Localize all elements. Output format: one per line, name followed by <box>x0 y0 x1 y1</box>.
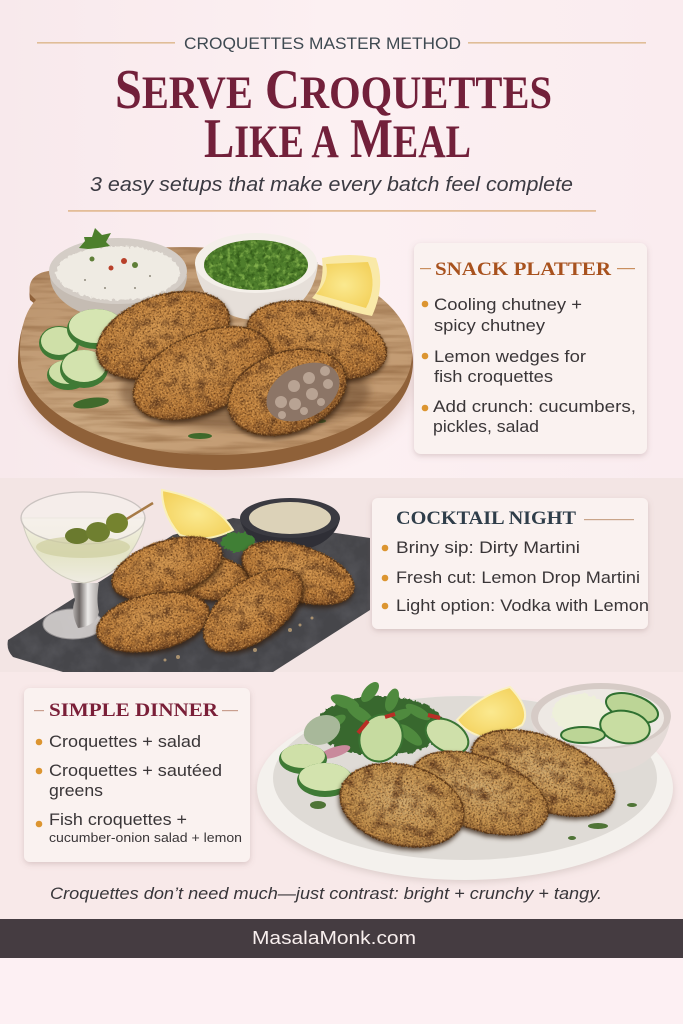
bullet: lemon: Lemon wedges for <box>434 348 587 366</box>
footer bar <box>0 919 683 958</box>
heading: COCKTAIL NIGHT <box>396 508 576 529</box>
title line 2: LIKE A MEAL <box>204 108 471 170</box>
card <box>24 688 250 862</box>
bowl: cooling chutney <box>49 228 187 319</box>
crumb scatter <box>164 616 314 662</box>
bullet: greens: Croquettes + sautéed <box>49 762 222 780</box>
herb scatter <box>310 801 637 840</box>
bullet: fish <box>36 811 242 845</box>
plate cucumbers <box>279 744 353 797</box>
croquette back right <box>239 288 395 392</box>
croquette middle <box>401 735 559 851</box>
lemon wedge <box>457 687 525 737</box>
cocktail band background <box>0 478 683 672</box>
bullet: light option: Light option: Vodka with Lemon <box>396 597 649 615</box>
dip bowl <box>240 498 340 551</box>
illustration: simple dinner <box>257 679 673 882</box>
cucumbers <box>39 309 125 390</box>
subtitle: 3 easy setups that make every batch feel complete <box>90 174 573 196</box>
martini glass <box>21 492 153 639</box>
slate board <box>8 518 370 672</box>
croquette right <box>460 713 626 833</box>
parsley sprig <box>79 228 111 249</box>
croquette behind <box>161 549 253 605</box>
croquette top left <box>104 525 230 611</box>
illustration: snack platter <box>18 228 413 474</box>
bullet: salad: Croquettes + salad <box>49 733 201 751</box>
salad bowl <box>531 683 671 774</box>
illustration: cocktail night <box>8 490 370 672</box>
croquette back left <box>85 275 241 395</box>
header rule <box>68 210 596 212</box>
bullet: briny sip: Briny sip: Dirty Martini <box>396 539 580 557</box>
eyebrow: CROQUETTES MASTER METHOD <box>184 35 461 53</box>
croquette lower right <box>189 552 317 668</box>
shadow under croquettes <box>120 354 370 430</box>
card <box>414 243 647 454</box>
lemon wedge <box>162 490 233 539</box>
croquette front <box>331 751 473 859</box>
bullet: crunch <box>422 398 636 436</box>
olives on pick <box>65 503 153 544</box>
panel: cocktail night <box>372 498 649 629</box>
bullet: chutneys: Cooling chutney + <box>434 296 582 314</box>
panel: snack platter <box>414 243 647 454</box>
bowl: green chutney <box>195 233 318 320</box>
herb garnish <box>221 532 255 552</box>
bullet: crunch: pickles, salad <box>433 418 539 436</box>
croquette front <box>119 308 285 438</box>
closing note: Croquettes don’t need much—just contrast: bright + crunchy + tangy. <box>50 885 602 903</box>
title line 1: SERVE CROQUETTES <box>115 59 552 121</box>
cut croquette with filling <box>216 334 358 450</box>
salad greens <box>299 679 474 769</box>
board <box>18 247 413 470</box>
eyebrow rule left <box>37 42 175 44</box>
bullet: greens <box>36 762 222 800</box>
panel: simple dinner <box>24 688 250 862</box>
bullet: fish: cucumber-onion salad + lemon <box>49 830 242 845</box>
dinner band background <box>0 672 683 919</box>
bullet: chutneys: spicy chutney <box>434 317 546 335</box>
plate <box>257 696 673 882</box>
croquette right <box>234 529 362 617</box>
bullet: lemon <box>422 348 587 386</box>
bullet: fresh cut: Fresh cut: Lemon Drop Martini <box>396 569 640 587</box>
bullet: fish: Fish croquettes + <box>49 811 187 829</box>
bullet: lemon: fish croquettes <box>434 368 553 386</box>
bullet: crunch: Add crunch: cucumbers, <box>433 398 636 416</box>
croquette lower left <box>91 583 215 661</box>
heading: SIMPLE DINNER <box>49 700 218 721</box>
lemon wedges <box>312 255 380 316</box>
bullet: greens: greens <box>49 782 103 800</box>
card <box>372 498 648 629</box>
website: MasalaMonk.com <box>252 928 416 948</box>
bullet: chutneys <box>422 296 582 335</box>
heading: SNACK PLATTER <box>435 259 611 280</box>
eyebrow rule right <box>468 42 646 44</box>
bottom strip <box>0 958 683 1024</box>
header <box>37 35 646 212</box>
herbs scatter <box>72 396 326 439</box>
